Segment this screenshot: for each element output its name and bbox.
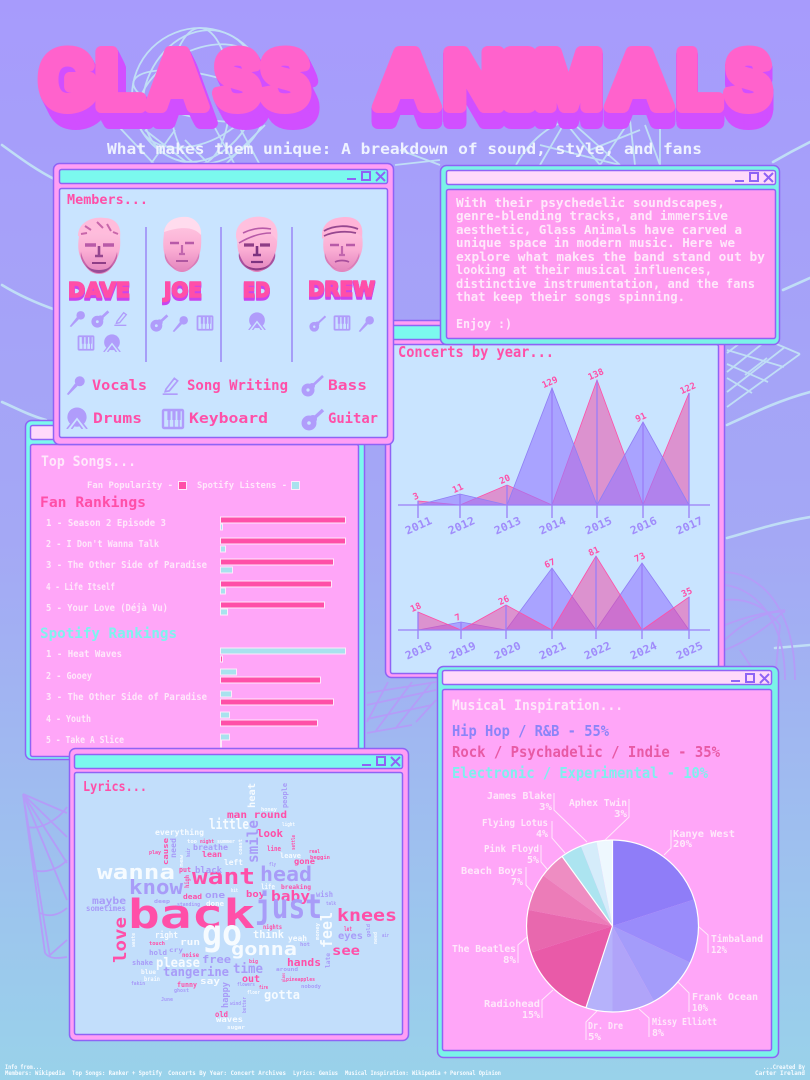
word cloud: think <box>253 928 284 941</box>
heading: fan rankings: Fan Rankings <box>40 495 146 511</box>
area chart: 2018 to 2025: 18 <box>409 601 423 615</box>
word cloud: time <box>233 962 263 977</box>
intro text: distinctive instrumentation, and the fans <box>456 277 755 291</box>
word cloud: wanna <box>97 860 175 884</box>
head: Drew <box>322 217 363 272</box>
word cloud: waste <box>131 933 137 947</box>
word cloud: eyes <box>338 931 363 942</box>
subtitle: What makes them unique: A breakdown of sound, style, and fans <box>107 140 702 158</box>
word cloud: beggin <box>310 855 330 861</box>
area chart: 2018 to 2025: 2024 <box>628 639 659 662</box>
word cloud: real <box>309 849 320 855</box>
word cloud: big <box>249 959 258 965</box>
word cloud: flowers <box>237 982 255 988</box>
song list: fan rankings: 1 - Season 2 Episode 3 <box>46 517 166 529</box>
panel: lyrics <box>70 748 408 1040</box>
pie labels: 12% <box>711 945 727 956</box>
heading: spotify rankings: Spotify Rankings <box>40 626 177 642</box>
word cloud: smile <box>244 820 262 863</box>
pie labels: Frank Ocean <box>692 992 758 1003</box>
word cloud: shake <box>132 959 153 967</box>
word cloud: talk <box>326 901 336 907</box>
member names: DREW <box>308 277 375 301</box>
title: L <box>96 35 143 124</box>
legend: Spotify Listens - <box>197 480 287 491</box>
member names: ED <box>243 278 270 302</box>
heading: top songs: Top Songs... <box>41 454 136 470</box>
legend: Fan Popularity - <box>87 480 173 491</box>
word cloud: light <box>282 822 295 828</box>
area chart: 2011 to 2017: 2011 <box>403 514 434 537</box>
area chart: 2018 to 2025: 26 <box>497 594 511 608</box>
head: Ed <box>236 217 277 272</box>
pie labels: James Blake <box>487 791 552 802</box>
credit: Carter Ireland <box>755 1070 805 1077</box>
word cloud: wish <box>316 889 333 899</box>
intro text: With their psychedelic soundscapes, <box>456 196 725 210</box>
word cloud: little <box>209 817 249 833</box>
intro text: Enjoy :) <box>456 317 512 331</box>
area chart: 2011 to 2017: 91 <box>634 411 648 425</box>
word cloud: coast <box>238 839 244 855</box>
song list: spotify rankings: 1 - Heat Waves <box>46 649 122 660</box>
word cloud: black <box>195 866 223 876</box>
song list: fan rankings: 2 - I Don't Wanna Talk <box>46 539 159 550</box>
pie labels: Kanye West <box>673 829 735 840</box>
pie labels: 3% <box>539 802 552 813</box>
legend <box>87 480 300 491</box>
word cloud: people <box>281 783 289 808</box>
pie labels <box>452 791 763 1043</box>
heading: lyrics: Lyrics... <box>83 780 147 795</box>
area chart: 2011 to 2017 <box>398 367 710 537</box>
pie labels: 20% <box>673 839 692 850</box>
word cloud: heat <box>247 783 258 808</box>
instrument legend labels: Drums <box>93 411 142 427</box>
panel: musical inspiration <box>438 666 778 1058</box>
area chart: 2018 to 2025: 2022 <box>582 639 613 662</box>
word cloud: done <box>206 900 224 908</box>
title: G <box>40 35 95 124</box>
intro text: aesthetic, Glass Animals have carved a <box>456 223 742 237</box>
intro text: that keep their songs spinning. <box>456 290 685 304</box>
word cloud: nights <box>263 924 282 931</box>
word cloud: noise <box>182 952 199 959</box>
word cloud: floor <box>247 990 260 996</box>
intro text: unique space in modern music. Here we <box>456 236 735 250</box>
word cloud: line <box>267 845 281 853</box>
title: A <box>608 35 671 124</box>
genre legend: Rock / Psychadelic / Indie - 35% <box>452 743 720 761</box>
area chart: 2018 to 2025: 2018 <box>403 639 434 662</box>
word cloud: new <box>179 854 185 867</box>
intro text: explore what makes the band stand out by <box>456 250 765 264</box>
instrument legend labels: Vocals <box>92 378 147 394</box>
song list: fan rankings: 4 - Life Itself <box>46 581 115 593</box>
window controls <box>347 172 385 181</box>
pie labels: Timbaland <box>711 933 763 945</box>
song list: fan rankings <box>46 517 207 614</box>
word cloud: sugar <box>227 1025 245 1031</box>
intro text: genre-blending tracks, and immersive <box>456 209 728 223</box>
word cloud: ghost <box>174 988 189 994</box>
area chart: 2011 to 2017: 3 <box>412 492 421 503</box>
pie labels: 10% <box>692 1003 708 1014</box>
word cloud: everything <box>155 827 204 837</box>
instrument legend labels: Bass <box>328 378 367 394</box>
word cloud: play <box>149 850 161 856</box>
intro text: looking at their musical influences, <box>456 263 712 277</box>
area chart: 2018 to 2025: 81 <box>587 545 601 559</box>
word cloud: maybe <box>92 896 126 907</box>
word cloud: money <box>315 923 321 940</box>
pie labels: Missy Elliott <box>652 1016 717 1028</box>
bar chart: spotify rankings <box>220 648 346 747</box>
pie labels: 8% <box>652 1028 664 1039</box>
word cloud: summer <box>217 839 235 845</box>
pie labels: Pink Floyd <box>484 843 539 855</box>
title: L <box>677 35 721 124</box>
word cloud: fakin <box>131 981 145 987</box>
word cloud: air <box>382 933 389 939</box>
pie chart <box>526 840 699 1012</box>
word cloud: breathe <box>193 843 228 852</box>
area chart: 2018 to 2025: 35 <box>680 586 694 600</box>
bar chart: fan rankings <box>220 517 346 615</box>
word cloud: look <box>257 827 283 840</box>
area chart: 2011 to 2017: 2017 <box>674 514 705 537</box>
word cloud: old <box>215 1010 228 1019</box>
pie labels: Beach Boys <box>461 866 523 877</box>
word cloud: love <box>111 917 131 963</box>
genre legend <box>452 722 720 782</box>
heading: members: Members... <box>67 193 148 208</box>
word cloud: life <box>261 883 275 891</box>
title: A <box>376 35 438 124</box>
area chart: 2011 to 2017: 2015 <box>583 514 614 537</box>
instrument legend labels <box>92 378 378 427</box>
pie labels: Radiohead <box>484 998 540 1010</box>
area chart: 2018 to 2025: 2019 <box>447 639 478 662</box>
word cloud: knees <box>337 906 397 926</box>
word cloud: head <box>260 862 312 886</box>
member names: DAVE <box>68 278 130 302</box>
word cloud: high <box>184 875 191 888</box>
word cloud: want <box>192 865 255 890</box>
word cloud: tangerine <box>163 965 229 979</box>
word cloud: pineapples <box>286 977 315 983</box>
word cloud: feel <box>317 912 336 948</box>
head: Joe <box>163 217 201 272</box>
word cloud: touch <box>149 941 165 947</box>
genre legend: Hip Hop / R&B - 55% <box>452 722 609 740</box>
word cloud: honey <box>261 807 277 813</box>
word cloud: breaking <box>281 884 311 891</box>
word cloud: need <box>373 932 379 944</box>
word cloud: gone <box>294 857 315 866</box>
panel: intro <box>440 166 780 344</box>
word cloud: gotta <box>264 988 300 1002</box>
word cloud: waves <box>216 1015 243 1024</box>
window controls <box>362 757 400 766</box>
pie labels: 5% <box>527 855 539 866</box>
song list: spotify rankings: 3 - The Other Side of Paradise <box>46 691 207 703</box>
pie labels: 15% <box>522 1010 540 1021</box>
word cloud: cause <box>162 838 170 865</box>
song list: fan rankings: 5 - Your Love (Déjà Vu) <box>46 602 168 614</box>
title: M <box>535 35 602 124</box>
word cloud: funny <box>177 981 198 989</box>
word cloud: yeah <box>288 934 307 943</box>
genre legend: Electronic / Experimental - 10% <box>452 764 708 782</box>
window controls <box>735 173 773 182</box>
sources footer <box>5 1064 501 1077</box>
word cloud: June <box>161 997 173 1003</box>
pie labels: Flying Lotus <box>482 817 548 829</box>
title <box>40 35 771 124</box>
area chart: 2018 to 2025 <box>398 545 710 662</box>
word cloud: blue <box>141 969 156 976</box>
pie labels: 5% <box>588 1032 601 1043</box>
word cloud: put <box>179 866 191 874</box>
word cloud: lean <box>202 850 222 859</box>
area chart: 2018 to 2025: 67 <box>543 557 557 571</box>
song list: fan rankings: 3 - The Other Side of Paradise <box>46 559 207 571</box>
word cloud: know <box>129 875 184 899</box>
sources footer: Members: Wikipedia <box>5 1070 65 1077</box>
word cloud: one <box>205 891 226 901</box>
title: S <box>261 35 309 124</box>
title: I <box>504 35 535 124</box>
word cloud: let <box>344 926 352 933</box>
word cloud: need <box>169 838 178 858</box>
heading: concerts: Concerts by year... <box>398 343 554 361</box>
member names: JOE <box>162 278 202 302</box>
word cloud: go <box>202 913 242 954</box>
intro text <box>456 196 765 331</box>
word cloud: night <box>200 839 214 845</box>
sources footer: Info from... <box>5 1064 42 1071</box>
word cloud: hit <box>231 888 238 894</box>
area chart: 2011 to 2017: 2014 <box>537 514 568 537</box>
sources footer: Top Songs: Ranker + Spotify <box>72 1070 162 1077</box>
member names <box>68 277 375 302</box>
word cloud: settle <box>291 835 297 850</box>
pie labels: 3% <box>614 809 627 820</box>
area chart: 2011 to 2017: 2012 <box>446 514 477 537</box>
area chart: 2011 to 2017: 2013 <box>492 514 523 537</box>
word cloud: out <box>242 974 260 985</box>
area chart: 2011 to 2017: 20 <box>498 473 512 487</box>
instrument legend labels: Song Writing <box>187 378 288 394</box>
word cloud: please <box>156 956 200 971</box>
pie labels: The Beatles <box>452 944 516 955</box>
pie labels: Dr. Dre <box>588 1021 623 1032</box>
instrument legend labels: Guitar <box>328 411 378 427</box>
word cloud: gonna <box>231 939 297 960</box>
dividers <box>146 227 292 362</box>
area chart: 2011 to 2017: 129 <box>541 375 560 391</box>
song list: spotify rankings <box>46 649 207 746</box>
word cloud: brain <box>144 976 160 983</box>
word cloud: late <box>325 953 332 968</box>
title: S <box>215 35 260 124</box>
word cloud: baby <box>271 889 311 905</box>
song list: spotify rankings: 2 - Gooey <box>46 671 92 682</box>
word cloud: hold <box>149 949 167 957</box>
word cloud: boy <box>246 890 266 900</box>
title: S <box>726 35 771 124</box>
word cloud: back <box>128 892 255 938</box>
sources footer: Musical Inspiration: Wikipedia + Personal Opinion <box>345 1070 501 1077</box>
word cloud: man round <box>227 810 287 821</box>
word cloud: hot <box>300 942 310 948</box>
word cloud: hair <box>186 848 192 857</box>
window controls <box>731 674 769 683</box>
area chart: 2018 to 2025: 7 <box>454 613 463 624</box>
word cloud: free <box>202 953 231 966</box>
panel: concerts by year <box>386 320 724 678</box>
word cloud: sometimes <box>86 903 126 913</box>
heading: musical inspiration: Musical Inspiration... <box>452 698 623 714</box>
song list: spotify rankings: 5 - Take A Slice <box>46 734 124 746</box>
word cloud: hands <box>287 956 321 969</box>
credit: ...Created By <box>763 1064 805 1071</box>
word cloud: fly <box>269 862 276 868</box>
area chart: 2018 to 2025: 73 <box>633 551 647 565</box>
member instrument icons <box>70 311 374 352</box>
area chart: 2018 to 2025: 2025 <box>674 639 705 662</box>
word cloud: cry <box>169 947 183 954</box>
pie leader lines <box>518 793 708 1040</box>
pie labels: 8% <box>503 955 516 966</box>
word cloud: fire <box>259 985 268 991</box>
area chart: 2018 to 2025: 2020 <box>492 639 523 662</box>
word cloud: right <box>155 930 178 941</box>
head: Dave <box>78 218 120 274</box>
area chart: 2011 to 2017: 11 <box>451 482 465 496</box>
instrument legend icons <box>66 376 323 430</box>
word cloud: glass <box>281 973 286 982</box>
word cloud: standing <box>177 902 200 908</box>
word cloud: dead <box>183 893 202 901</box>
word cloud: too <box>187 839 197 845</box>
instrument legend labels: Keyboard <box>189 411 268 427</box>
pie labels: 7% <box>511 877 523 888</box>
credit <box>755 1064 805 1077</box>
song list: spotify rankings: 4 - Youth <box>46 714 91 725</box>
word cloud: gold <box>366 924 372 937</box>
word cloud: run <box>180 938 200 948</box>
word cloud: wind <box>230 1001 241 1007</box>
panel: top songs <box>26 420 364 760</box>
pie labels: 4% <box>536 829 548 840</box>
word cloud: just <box>255 887 322 927</box>
title: A <box>148 35 206 124</box>
sources footer: Concerts By Year: Concert Archives <box>168 1070 286 1077</box>
word cloud: nobody <box>301 984 321 990</box>
word cloud: leave <box>280 852 301 860</box>
pie labels: Aphex Twin <box>569 797 627 809</box>
area chart: 2018 to 2025: 2021 <box>537 639 568 662</box>
word cloud: around <box>276 967 298 973</box>
sources footer: Lyrics: Genius <box>293 1070 338 1077</box>
word cloud: say <box>200 977 221 987</box>
area chart: 2011 to 2017: 122 <box>679 381 698 397</box>
title: N <box>444 35 504 124</box>
word cloud <box>86 783 397 1031</box>
word cloud: deep <box>154 899 170 905</box>
word cloud: left <box>224 858 243 867</box>
word cloud: better <box>242 997 248 1013</box>
area chart: 2011 to 2017: 138 <box>587 367 606 383</box>
word cloud: happy <box>221 981 231 1008</box>
area chart: 2011 to 2017: 2016 <box>628 514 659 537</box>
panel: members <box>54 164 394 444</box>
word cloud: see <box>332 944 360 959</box>
